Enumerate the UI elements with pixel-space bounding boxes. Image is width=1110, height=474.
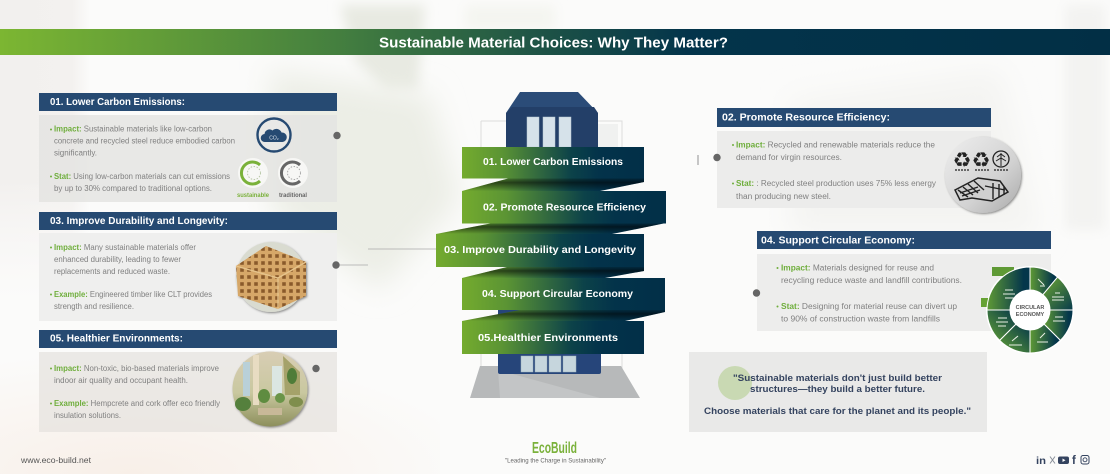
text: impact 04: Impact: Materials designed for reuse and: [781, 264, 934, 272]
icon: green interior: [232, 352, 308, 426]
ribbon folds: [436, 178, 666, 321]
marker dot: [713, 154, 721, 161]
text: impact 04: to 90% of construction waste from landfills: [781, 314, 940, 324]
icon: cloud: [258, 118, 290, 152]
upper windows: [527, 117, 571, 147]
panel: 02 resource efficiency: [713, 108, 1021, 213]
text: impact 04: [776, 264, 962, 324]
ghost outline: [481, 121, 622, 390]
text: impact 05: insulation solutions.: [54, 411, 121, 420]
text: impact 05: Example: Hempcrete and cork offer eco friendly: [54, 399, 220, 408]
ribbon 04: [462, 278, 665, 310]
panel: 03 durability and longevity: 03. Improve Durability and Longevity:: [50, 216, 228, 227]
marker dot: [312, 365, 320, 372]
centre label: [1010, 290, 1050, 330]
icon: sustainable gauge: sustainable: [237, 193, 270, 199]
text: impact 01: Impact: Sustainable materials like low-carbon: [54, 124, 212, 134]
text: impact 01: [50, 124, 235, 193]
text: impact 02: Stat: : Recycled steel production uses 75% less energy: [736, 179, 936, 188]
text: impact 02: than producing new steel.: [736, 192, 831, 201]
text: impact 05: [50, 364, 220, 420]
callout: quote: "Sustainable materials don't just build better: [733, 373, 942, 384]
marker dot: [332, 261, 340, 269]
panel: 04 circular economy: 04. Support Circular Economy:: [761, 236, 915, 246]
text: impact 02: [732, 140, 936, 201]
marker dot: [753, 289, 760, 297]
building illustration: [470, 92, 640, 398]
icon: cloud: CO₂: [269, 136, 279, 142]
ribbon 01: 01. Lower Carbon Emissions: [483, 157, 623, 168]
text: impact 01: by up to 30% compared to traditional options.: [54, 184, 212, 193]
callout: quote: structures—they build a better future.: [750, 384, 925, 395]
logo: EcoBuild: [532, 440, 577, 457]
website url: www.eco-build.net: [20, 456, 92, 465]
lower body: [498, 300, 601, 374]
icon: traditional gauge: traditional: [279, 193, 307, 199]
icon: recycled materials: ♻: [953, 148, 971, 172]
text: impact 03: Impact: Many sustainable materials offer: [54, 243, 196, 252]
icon: timber structure: [236, 242, 306, 312]
text: impact 02: demand for virgin resources.: [736, 153, 842, 162]
icon: recycled materials: [945, 137, 1021, 213]
ribbon 01: [462, 147, 644, 178]
ribbon stack: [436, 147, 666, 354]
ribbon 02: 02. Promote Resource Efficiency: [483, 202, 646, 214]
panel: 04 circular economy: [753, 231, 1074, 354]
ribbon 03: [436, 234, 644, 267]
segment marks: [996, 279, 1065, 345]
text: impact 03: strength and resilience.: [54, 302, 134, 311]
social icons: [1036, 455, 1089, 467]
logo: [505, 440, 606, 464]
roof: [506, 92, 598, 147]
panel: 03 durability and longevity: [39, 212, 340, 321]
text: impact 03: enhanced durability, leading to fewer: [54, 255, 181, 264]
ribbon 05: 05.Healthier Environments: [478, 333, 618, 344]
ribbon 05: [462, 321, 644, 354]
text: impact 04: recycling reduce waste and landfill contributions.: [781, 276, 962, 285]
connector lines: [336, 155, 698, 265]
tabs: [992, 267, 1014, 276]
social icons: in: [1036, 455, 1046, 467]
callout: quote: Choose materials that care for the planet and its people.": [704, 406, 971, 417]
marker dot: [333, 132, 341, 139]
callout: quote: [689, 352, 987, 432]
ribbon 03: 03. Improve Durability and Longevity: [444, 245, 636, 256]
text: impact 01: concrete and recycled steel reduce embodied carbon: [54, 136, 235, 146]
lower windows: [521, 356, 576, 372]
panel: 01 lower carbon emissions: [39, 93, 341, 202]
text: impact 02: Impact: Recycled and renewable materials reduce the: [736, 140, 936, 150]
text: impact 04: Stat: Designing for material reuse can divert up: [781, 302, 958, 311]
text: impact 01: significantly.: [54, 148, 97, 158]
text: impact 05: indoor air quality and occupant health.: [54, 376, 188, 385]
panel: 01 lower carbon emissions: 01. Lower Carbon Emissions:: [50, 97, 185, 108]
text: impact 05: Impact: Non-toxic, bio-based materials improve: [54, 364, 220, 373]
panel: 05 healthier environments: [39, 330, 337, 432]
text: impact 01: Stat: Using low-carbon materials can cut emissions: [54, 172, 230, 181]
text: impact 03: [50, 243, 212, 311]
ground shadow: [470, 366, 640, 398]
title: Sustainable Material Choices: Why They Matter?: [379, 34, 728, 52]
chart: circular economy wheel: CIRCULAR: [1016, 305, 1044, 311]
title bar: [0, 29, 1110, 55]
ribbon 04: 04. Support Circular Economy: [482, 289, 633, 300]
panel: 02 resource efficiency: 02. Promote Resource Efficiency:: [722, 112, 890, 124]
text: impact 03: Example: Engineered timber like CLT provides: [54, 290, 212, 299]
icon: sustainable gauge: [237, 158, 270, 199]
icon: recycled materials: ♻: [972, 148, 990, 172]
ribbon 02: [462, 191, 666, 224]
chart: circular economy wheel: [981, 266, 1074, 354]
icon: traditional gauge: [278, 158, 308, 199]
panel: 05 healthier environments: 05. Healthier Environments:: [50, 334, 183, 344]
text: impact 03: replacements and reduced waste.: [54, 267, 170, 276]
social icons: f: [1072, 455, 1076, 467]
logo: "Leading the Charge in Sustainability": [505, 458, 606, 464]
chart: circular economy wheel: ECONOMY: [1016, 312, 1045, 318]
